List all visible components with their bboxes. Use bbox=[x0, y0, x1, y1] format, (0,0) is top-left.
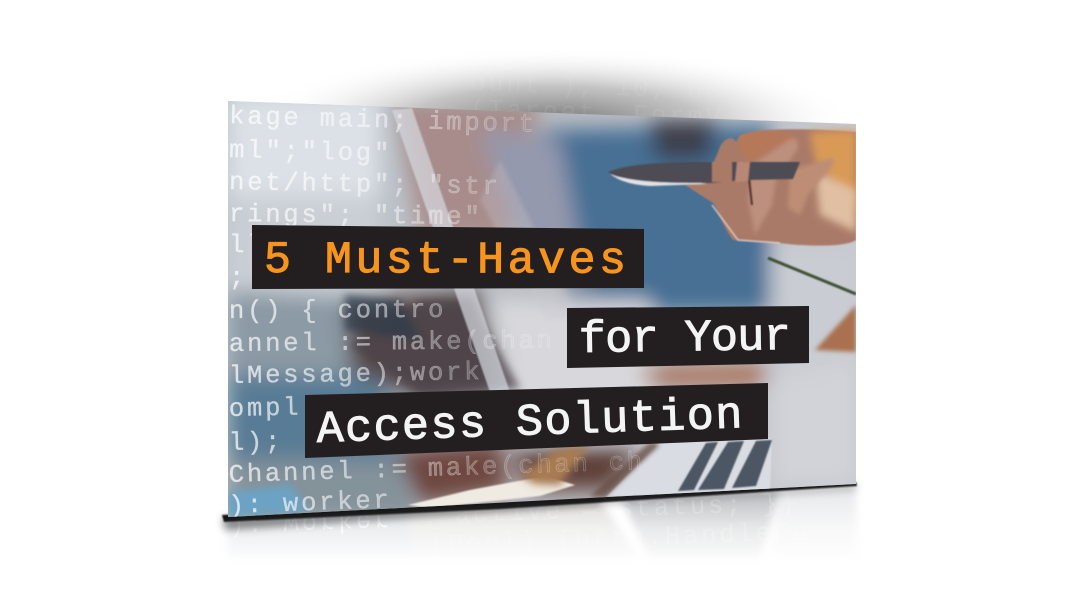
reflection: mirrored worker text: ): worker bbox=[229, 505, 393, 540]
photo: keyboard rows bbox=[678, 440, 772, 491]
code overlay text: rings"; "time" bbox=[229, 200, 483, 232]
panel: photo card bbox=[228, 95, 860, 521]
faint text above the card: ount ), 10, 60* bbox=[470, 69, 742, 107]
code overlay text: ompl bbox=[229, 393, 302, 424]
title bar: for Your: for Your bbox=[578, 312, 791, 366]
photo: blurred colour masses bbox=[228, 95, 860, 520]
reflection: photo colours bbox=[228, 486, 858, 552]
code overlay text: ml";"log" bbox=[229, 136, 392, 169]
code overlay text: annel := make(chan bbox=[229, 327, 555, 359]
code overlay text: kage main; import bbox=[229, 102, 537, 140]
photo: laptop lid edge bbox=[392, 108, 510, 392]
faint text below card: active = status; }} bbox=[454, 489, 799, 530]
top shadow behind card bbox=[255, 48, 855, 200]
photo: base bbox=[228, 100, 858, 520]
faint text below card bbox=[429, 489, 810, 560]
code overlay text: n() { contro bbox=[229, 296, 446, 326]
code overlay text bbox=[228, 102, 645, 521]
title bar: 5 Must-Haves: 5 Must-Haves bbox=[264, 235, 626, 287]
title bar: Access Solution: Access Solution bbox=[316, 390, 743, 456]
reflection below card bbox=[228, 486, 858, 552]
photo: bottom left blue object bbox=[228, 485, 310, 518]
photo: person arm and shirt shadow bbox=[350, 300, 520, 395]
photo: book bbox=[408, 476, 575, 508]
faint text above the card bbox=[470, 69, 742, 133]
photo: green pencil bbox=[768, 258, 856, 294]
faint text below card: (Pool) {http.HandleFu bbox=[429, 518, 810, 560]
bottom contact shadow bbox=[222, 482, 857, 522]
faint text above the card: (Target, FormV bbox=[470, 95, 724, 133]
code overlay text: ll bbox=[229, 231, 265, 260]
code overlay text: ; bbox=[229, 264, 247, 293]
photo: forearm at right edge bbox=[815, 305, 856, 352]
photo: laptop base bbox=[606, 438, 772, 497]
photo: hand bbox=[685, 129, 856, 246]
photo: pen bbox=[608, 162, 800, 186]
code overlay text: lMessage);work bbox=[229, 358, 483, 391]
code overlay text: Channel := make(chan ch bbox=[228, 448, 645, 490]
code overlay text: net/http"; "str bbox=[229, 168, 501, 202]
code overlay text: ): worker bbox=[228, 486, 392, 521]
code overlay text: l); bbox=[228, 428, 284, 458]
